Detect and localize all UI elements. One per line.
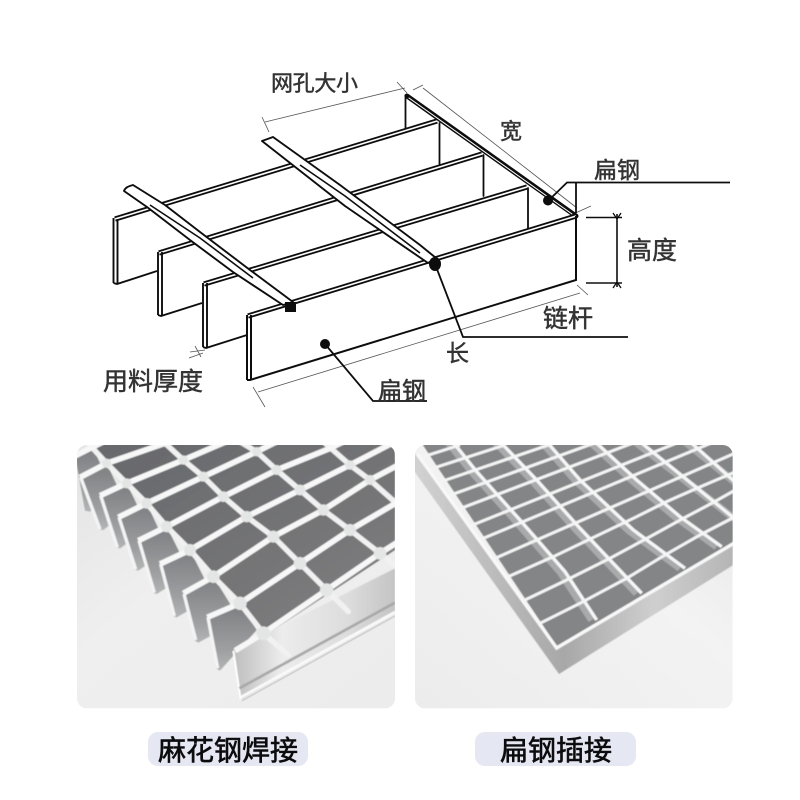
label: width: 宽 [500, 119, 522, 144]
leader lines [325, 182, 730, 401]
weld node left [285, 302, 296, 312]
weld node front face [320, 339, 330, 349]
weld nodes [102, 447, 386, 640]
bar 4 [247, 216, 576, 380]
height dimension [586, 213, 622, 288]
infographic canvas [77, 72, 733, 766]
panel: technical diagram of steel grating [103, 71, 730, 407]
caption pill: twisted steel welding [148, 732, 308, 766]
label: length: 长 [446, 340, 469, 366]
bar 1 [114, 121, 437, 284]
bar 3 [203, 187, 527, 348]
cross bars [87, 442, 398, 655]
panel: flat steel press-lock grating photo [413, 432, 738, 708]
weld node middle [429, 257, 441, 271]
rear cross bar [406, 95, 576, 229]
cell walls [448, 442, 738, 620]
label: flat steel top: 扁钢 [594, 157, 640, 183]
bar end lips [81, 477, 218, 668]
long grid lines [423, 432, 738, 623]
label: flat steel bottom: 扁钢 [378, 378, 426, 405]
bar end faces [75, 448, 257, 671]
caption text: flat steel insertion: 扁钢插接 [500, 735, 612, 766]
bearing bars [114, 121, 576, 380]
grating openings [421, 442, 735, 646]
label: height: 高度 [627, 237, 677, 265]
label: mesh size: 网孔大小 [271, 71, 358, 96]
twisted bar left [124, 185, 293, 305]
twisted bar middle [262, 137, 436, 263]
caption pill: flat steel insertion [475, 732, 636, 766]
weld node rear [543, 196, 553, 206]
frame top rim [436, 482, 733, 650]
bar 2 [158, 154, 482, 316]
bearing bars [75, 440, 398, 651]
label: link bar: 链杆 [543, 305, 593, 333]
panel: twisted steel welded grating photo [75, 440, 398, 708]
cross grid lines [453, 442, 738, 620]
frame outer face [413, 452, 735, 674]
caption text: twisted steel welding: 麻花钢焊接 [158, 735, 298, 766]
grating openings [83, 442, 395, 637]
front bar face [233, 568, 395, 699]
dimension lines [189, 82, 591, 407]
label: material thickness: 用料厚度 [103, 368, 203, 396]
